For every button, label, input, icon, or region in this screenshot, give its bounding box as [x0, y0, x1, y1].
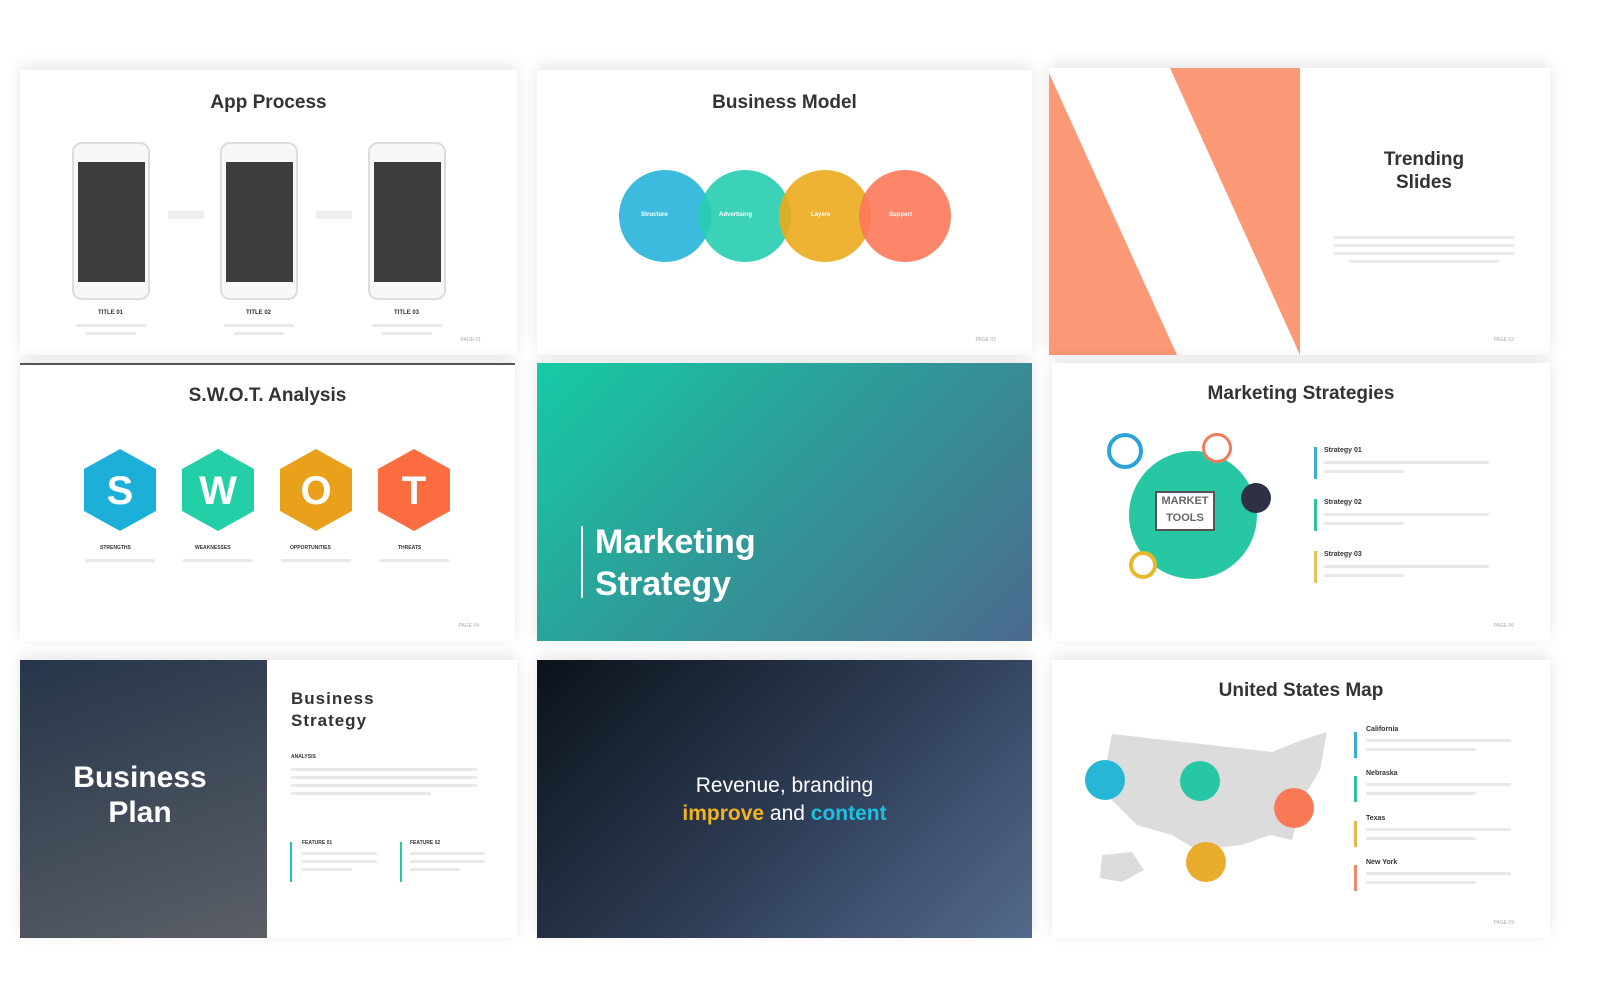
heading: United States Map — [1219, 680, 1383, 701]
strategies list — [1314, 447, 1489, 583]
hexagons: O — [300, 469, 332, 513]
slide: trending slides: PAGE 03 — [1494, 337, 1514, 343]
illustration: market tools: MARKET — [1161, 495, 1209, 507]
heading: business strategy: Strategy — [291, 711, 367, 730]
strategies list: Strategy 02 — [1324, 499, 1362, 506]
slide: trending slides — [1049, 68, 1550, 355]
heading: trending slides: Slides — [1396, 172, 1452, 193]
hexagons — [84, 449, 450, 531]
circles: Structure — [641, 212, 668, 218]
phones — [72, 142, 446, 335]
circles: Support — [889, 212, 912, 218]
phones: TITLE 01 — [98, 310, 123, 316]
heading: business model: Business Model — [712, 92, 857, 113]
heading: trending slides — [1384, 149, 1464, 193]
slide: swot: PAGE 04 — [459, 623, 479, 629]
illustration: market tools: TOOLS — [1166, 512, 1204, 524]
heading: swot: S.W.O.T. Analysis — [189, 385, 346, 406]
hexagons: W — [199, 469, 237, 513]
strategies list: Strategy 01 — [1324, 447, 1362, 454]
state list — [1354, 726, 1511, 891]
slide: marketing strategy — [537, 363, 1032, 641]
slide: us map — [1052, 660, 1550, 938]
slide: revenue branding — [537, 660, 1032, 938]
heading: Marketing Strategies — [1208, 383, 1394, 404]
heading: trending slides: Trending — [1384, 149, 1464, 170]
state list: California — [1366, 726, 1398, 733]
text: revenue: Revenue, branding — [696, 774, 873, 797]
heading: business plan — [73, 761, 207, 829]
illustration: market tools — [1107, 433, 1271, 579]
slide: swot: STRENGTHS — [100, 545, 131, 551]
bar — [581, 526, 583, 598]
circles — [619, 170, 951, 262]
heading: marketing strategy: Marketing — [595, 523, 756, 561]
heading: app process: App Process — [210, 92, 327, 113]
slide: marketing strategies — [1052, 363, 1550, 641]
heading: business plan: Plan — [108, 796, 172, 829]
features: FEATURE 01 — [302, 840, 332, 846]
heading: marketing strategy — [595, 523, 756, 603]
state list: New York — [1366, 859, 1397, 866]
hexagons: T — [402, 469, 426, 513]
state list: Nebraska — [1366, 770, 1398, 777]
heading: business strategy — [291, 689, 375, 730]
slide: app process — [20, 70, 517, 355]
slide: swot — [20, 363, 515, 641]
phones: TITLE 02 — [246, 310, 271, 316]
slide: business plan — [20, 660, 517, 938]
slide: marketing strategies: PAGE 06 — [1494, 623, 1514, 629]
state list: Texas — [1366, 815, 1385, 822]
heading: business plan: Business — [73, 761, 207, 794]
slide: app process: PAGE 01 — [461, 337, 481, 343]
orange shapes — [1049, 68, 1300, 355]
strategies list: Strategy 03 — [1324, 551, 1362, 558]
heading: business strategy: Business — [291, 689, 375, 708]
phones: TITLE 03 — [394, 310, 419, 316]
heading: marketing strategy: Strategy — [595, 565, 731, 603]
dark panel — [20, 660, 267, 938]
hexagons: S — [107, 469, 133, 513]
slide: swot: OPPORTUNITIES — [290, 545, 331, 551]
map — [1085, 732, 1327, 882]
slide: swot: THREATS — [398, 545, 421, 551]
slide: swot: WEAKNESSES — [195, 545, 231, 551]
slide: business model: PAGE 02 — [976, 337, 996, 343]
text: revenue: improve and content — [682, 802, 887, 825]
slide: us map: PAGE 09 — [1494, 920, 1514, 926]
features — [290, 840, 485, 882]
features: FEATURE 02 — [410, 840, 440, 846]
text: revenue — [682, 774, 887, 825]
circles: Layers — [811, 212, 830, 218]
slide: business model — [537, 70, 1032, 355]
circles: Advertising — [719, 212, 752, 218]
slide: business plan: ANALYSIS — [291, 754, 316, 760]
